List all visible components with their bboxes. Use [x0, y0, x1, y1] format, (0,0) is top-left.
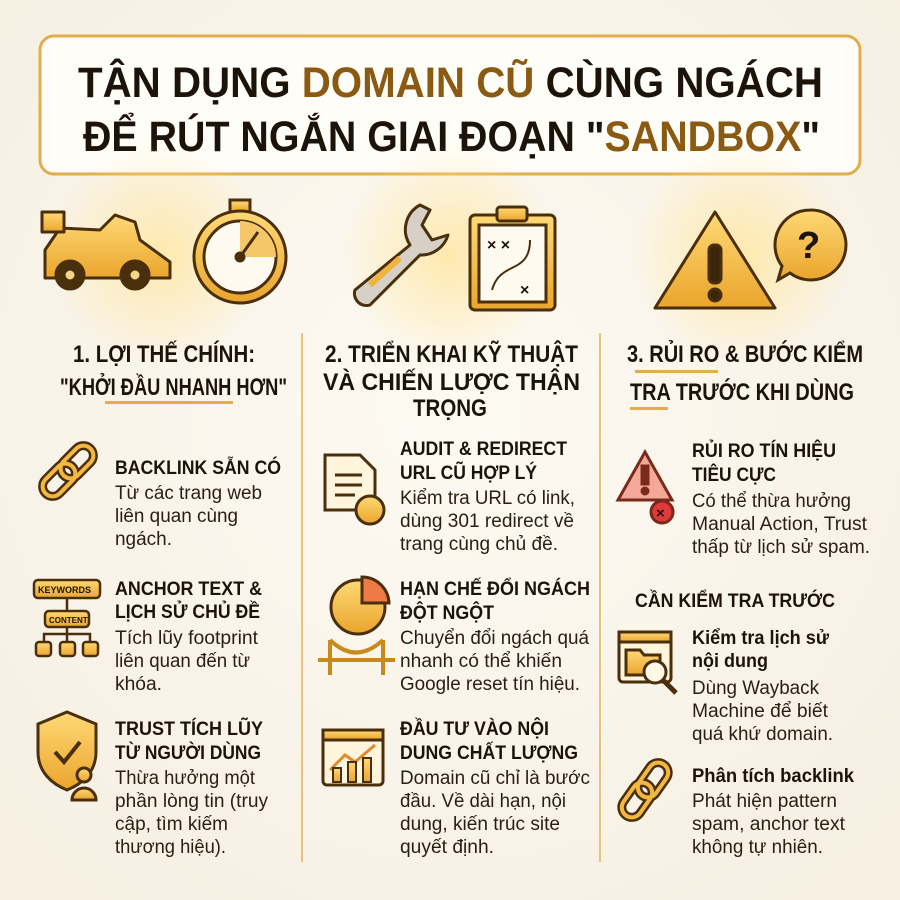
- item: audit redirect: trang cùng chủ đề.: [400, 534, 558, 555]
- heading: col2: 2. TRIỂN KHAI KỸ THUẬT: [325, 340, 578, 368]
- icon: race car: [42, 212, 170, 289]
- item: niche change: nhanh có thể khiến: [400, 651, 562, 672]
- item: audit redirect: dùng 301 redirect về: [400, 511, 574, 532]
- item: backlink: BACKLINK SẴN CÓ: [115, 457, 281, 479]
- heading: col2: TRỌNG: [413, 395, 487, 422]
- item: quality content: [323, 718, 590, 858]
- item: negative signal risk: thấp từ lịch sử spam.: [692, 537, 870, 558]
- item: content history: [619, 628, 833, 745]
- item: content history: Kiểm tra lịch sử: [692, 628, 829, 649]
- item: quality content: đầu. Về dài hạn, nội: [400, 791, 566, 812]
- item: backlink: [38, 441, 281, 550]
- item: backlink analysis: Phân tích backlink: [692, 766, 854, 787]
- item: backlink: Từ các trang web: [115, 483, 262, 504]
- item: anchor text: KEYWORDS: [38, 585, 91, 595]
- item: anchor text: CONTENT: [49, 616, 88, 625]
- item: trust: TỪ NGƯỜI DÙNG: [115, 742, 261, 764]
- item: niche change: HẠN CHẾ ĐỔI NGÁCH: [400, 578, 590, 600]
- heading: col3: [627, 339, 863, 410]
- item: trust: cập, tìm kiếm: [115, 814, 228, 835]
- item: anchor text: khóa.: [115, 674, 162, 695]
- item: negative signal risk: Manual Action, Trust: [692, 514, 868, 535]
- item: audit redirect: AUDIT & REDIRECT: [400, 439, 567, 460]
- heading: col3: TRA TRƯỚC KHI DÙNG: [630, 378, 854, 406]
- item: anchor text: Tích lũy footprint: [115, 628, 259, 649]
- icon: warning triangle: [655, 212, 775, 308]
- item: negative signal risk: ×: [656, 505, 665, 522]
- heading: col2: VÀ CHIẾN LƯỢC THẬN: [323, 368, 580, 396]
- item: negative signal risk: Có thể thừa hưởng: [692, 491, 851, 512]
- subheading: check before: CẦN KIỂM TRA TRƯỚC: [635, 590, 835, 612]
- title box: ĐỂ RÚT NGẮN GIAI ĐOẠN "SANDBOX": [83, 112, 820, 161]
- item: quality content: ĐẦU TƯ VÀO NỘI: [400, 718, 549, 740]
- item: negative signal risk: TIÊU CỰC: [692, 464, 776, 486]
- item: negative signal risk: [618, 440, 870, 558]
- item: anchor text: liên quan đến từ: [115, 651, 250, 672]
- item: content history: Dùng Wayback: [692, 678, 819, 699]
- heading: col1: [60, 340, 287, 404]
- heading: col2: [323, 340, 580, 422]
- item: trust: thương hiệu).: [115, 837, 226, 858]
- item: trust: Thừa hưởng một: [115, 768, 256, 789]
- item: quality content: dung, kiến trúc site: [400, 814, 560, 835]
- item: quality content: quyết định.: [400, 837, 494, 858]
- icon: stopwatch: [194, 200, 286, 303]
- icon: question bubble: ?: [797, 225, 820, 267]
- item: anchor text: [34, 579, 262, 695]
- item: backlink analysis: không tự nhiên.: [692, 837, 823, 858]
- item: audit redirect: URL CŨ HỢP LÝ: [400, 462, 537, 484]
- item: backlink: ngách.: [115, 529, 172, 550]
- item: quality content: Domain cũ chỉ là bước: [400, 768, 590, 789]
- item: backlink analysis: [618, 759, 854, 858]
- heading: col1: "KHỞI ĐẦU NHANH HƠN": [60, 372, 287, 401]
- glows: [50, 145, 270, 365]
- item: niche change: [318, 577, 590, 695]
- item: content history: quá khứ domain.: [692, 724, 833, 745]
- icon: clipboard: × ×: [487, 237, 510, 254]
- item: content history: Machine để biết: [692, 701, 829, 722]
- item: content history: nội dung: [692, 651, 768, 672]
- item: trust: phần lòng tin (truy: [115, 791, 269, 812]
- item: niche change: Chuyển đổi ngách quá: [400, 628, 589, 649]
- icon: wrench: [354, 205, 448, 306]
- item: audit redirect: Kiểm tra URL có link,: [400, 488, 575, 509]
- title box: TẬN DỤNG DOMAIN CŨ CÙNG NGÁCH: [78, 58, 823, 107]
- icon: question bubble: [775, 210, 846, 280]
- item: niche change: ĐỘT NGỘT: [400, 602, 494, 624]
- item: negative signal risk: RỦI RO TÍN HIỆU: [692, 440, 836, 462]
- item: backlink analysis: Phát hiện pattern: [692, 791, 837, 812]
- item: backlink: liên quan cùng: [115, 506, 238, 527]
- icon: clipboard: [470, 207, 555, 310]
- heading: col1: 1. LỢI THẾ CHÍNH:: [73, 340, 255, 368]
- item: quality content: DUNG CHẤT LƯỢNG: [400, 742, 578, 764]
- item: anchor text: LỊCH SỬ CHỦ ĐỀ: [115, 601, 260, 623]
- item: anchor text: ANCHOR TEXT &: [115, 579, 262, 600]
- item: niche change: Google reset tín hiệu.: [400, 674, 580, 695]
- dividers: [301, 333, 303, 862]
- item: audit redirect: [325, 439, 575, 555]
- item: trust: TRUST TÍCH LŨY: [115, 718, 263, 740]
- icon: clipboard: ×: [520, 282, 529, 299]
- item: trust: [38, 712, 269, 858]
- title box: [40, 36, 860, 174]
- item: backlink analysis: spam, anchor text: [692, 814, 846, 835]
